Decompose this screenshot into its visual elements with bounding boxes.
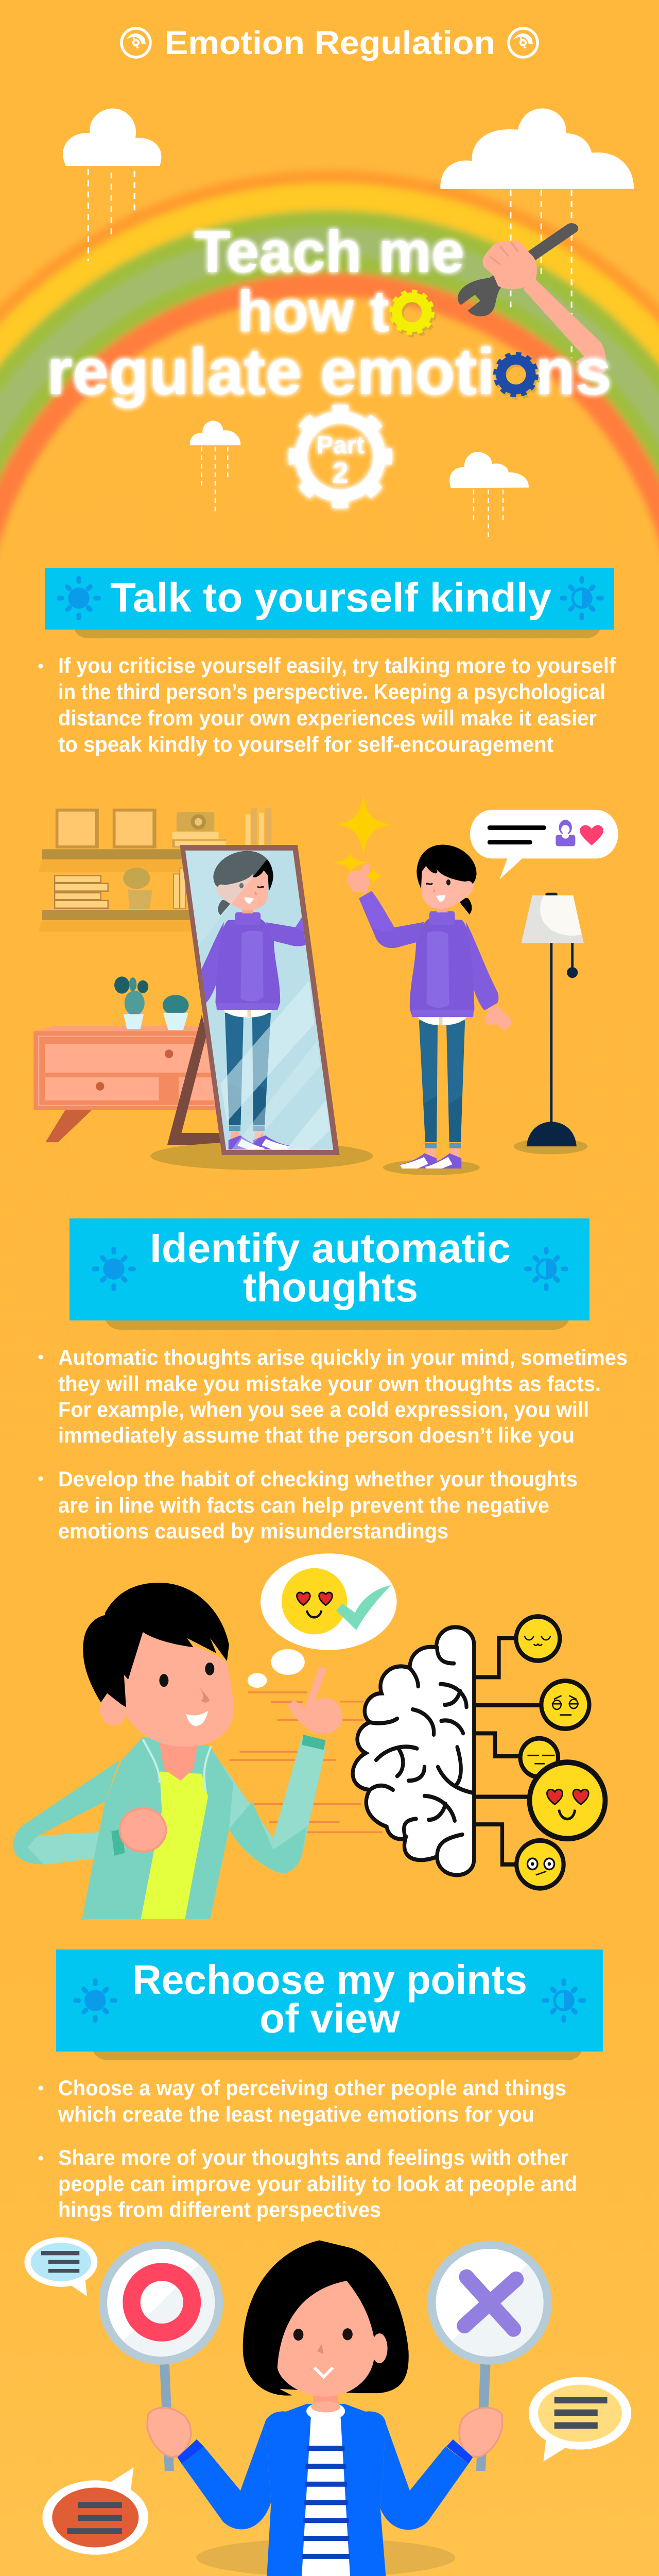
- brain connectors: [475, 1638, 542, 1865]
- illustration: man pointing at brain: [13, 1553, 605, 1919]
- text block: people can improve your ability to look at people and: [58, 2172, 577, 2196]
- text block: Share more of your thoughts and feelings with other: [58, 2145, 568, 2170]
- panel: Talk to yourself kindly: [38, 568, 616, 756]
- heading banner: [45, 568, 614, 630]
- mirror: [150, 845, 373, 1170]
- sign: cross: [427, 2241, 552, 2471]
- text block: distance from your own experiences will make it easier: [58, 706, 597, 730]
- main title: how to: [237, 279, 425, 344]
- girl with thumbs up: [346, 845, 511, 1175]
- thought bubble with emoji and check: [248, 1553, 397, 1688]
- text block: [38, 653, 616, 756]
- text block: in the third person’s perspective. Keeping a psychological: [58, 680, 605, 704]
- panel: Rechoose my points of view: [38, 1950, 603, 2222]
- header: Emotion Regulation: [122, 24, 537, 61]
- icon: half sun: [560, 576, 604, 620]
- heading banner shadow: [74, 613, 601, 638]
- text block: they will make you mistake your own thoughts as facts.: [58, 1371, 601, 1396]
- text block: to speak kindly to yourself for self-encouragement: [58, 732, 553, 756]
- main title: Teach me: [194, 219, 464, 285]
- text block: Choose a way of perceiving other people and things: [58, 2076, 566, 2100]
- icon: half sun: [524, 1247, 568, 1291]
- text block: Develop the habit of checking whether your thoughts: [58, 1467, 578, 1491]
- text block: Automatic thoughts arise quickly in your mind, sometimes: [58, 1345, 628, 1369]
- panel: Identify automatic thoughts: [38, 1218, 628, 1543]
- clouds with rain: [63, 108, 634, 539]
- heading banner shadow: [105, 1303, 569, 1330]
- illustration: room with shelves, cabinet and mirror: [33, 794, 618, 1175]
- icon: gauge right: [509, 28, 537, 57]
- header title: Emotion Regulation: [165, 24, 495, 61]
- gear: blue: [495, 354, 538, 398]
- heading text: Identify automatic: [150, 1225, 511, 1271]
- main title: regulate emotions: [47, 335, 612, 408]
- cabinet: [33, 1026, 223, 1142]
- main title: [47, 219, 612, 408]
- badge: Part 2 gear: Part: [317, 432, 365, 459]
- text block: immediately assume that the person doesn’t like you: [58, 1423, 575, 1447]
- brain: [353, 1627, 474, 1875]
- cactus plants: [114, 976, 189, 1030]
- speech bubble: yellow: [529, 2377, 631, 2462]
- illustration: woman holding signs: [24, 2238, 631, 2576]
- text block: [38, 2076, 577, 2222]
- text block: hings from different perspectives: [58, 2197, 381, 2222]
- floor lamp: [514, 893, 587, 1154]
- man in teal hoodie: [13, 1583, 342, 1919]
- heading banner shadow: [93, 2035, 582, 2060]
- heading text: [150, 1225, 511, 1310]
- rainbow: [0, 168, 659, 554]
- badge: Part 2 gear: 2: [332, 456, 349, 489]
- heading banner: [70, 1218, 589, 1320]
- icon: sparkles: [333, 794, 391, 886]
- floor shadow: [196, 2538, 455, 2576]
- icon: gauge left: [122, 28, 150, 57]
- speech bubble: [470, 810, 618, 879]
- icon: half sun: [542, 1978, 586, 2023]
- heading text: of view: [259, 1995, 401, 2041]
- text block: emotions caused by misunderstandings: [58, 1519, 448, 1543]
- speed lines: [229, 1692, 383, 1832]
- text block: are in line with facts can help prevent the negative: [58, 1493, 549, 1517]
- heading text: [132, 1957, 527, 2041]
- icon: sun: [73, 1978, 117, 2023]
- speech bubble: blue: [24, 2238, 97, 2296]
- speech bubble: red: [42, 2467, 148, 2555]
- heading text: thoughts: [243, 1264, 418, 1310]
- wrench and arm: [458, 228, 606, 378]
- icon: sun: [92, 1247, 136, 1291]
- heading text: Talk to yourself kindly: [110, 574, 552, 620]
- text block: which create the least negative emotions for you: [58, 2102, 534, 2126]
- text block: For example, when you see a cold expression, you will: [58, 1397, 589, 1421]
- icon: sun: [57, 576, 101, 620]
- text block: [38, 1345, 628, 1543]
- heading text: Rechoose my points: [132, 1957, 527, 2003]
- badge: Part 2 gear: [292, 409, 388, 504]
- text block: If you criticise yourself easily, try talking more to yourself: [58, 653, 616, 677]
- woman: [147, 2240, 502, 2576]
- gear: yellow: [391, 292, 435, 335]
- shelves with frames and books: [39, 808, 271, 931]
- sign: circle: [99, 2241, 223, 2471]
- emoji column: [516, 1617, 605, 1888]
- heading banner: [56, 1950, 603, 2052]
